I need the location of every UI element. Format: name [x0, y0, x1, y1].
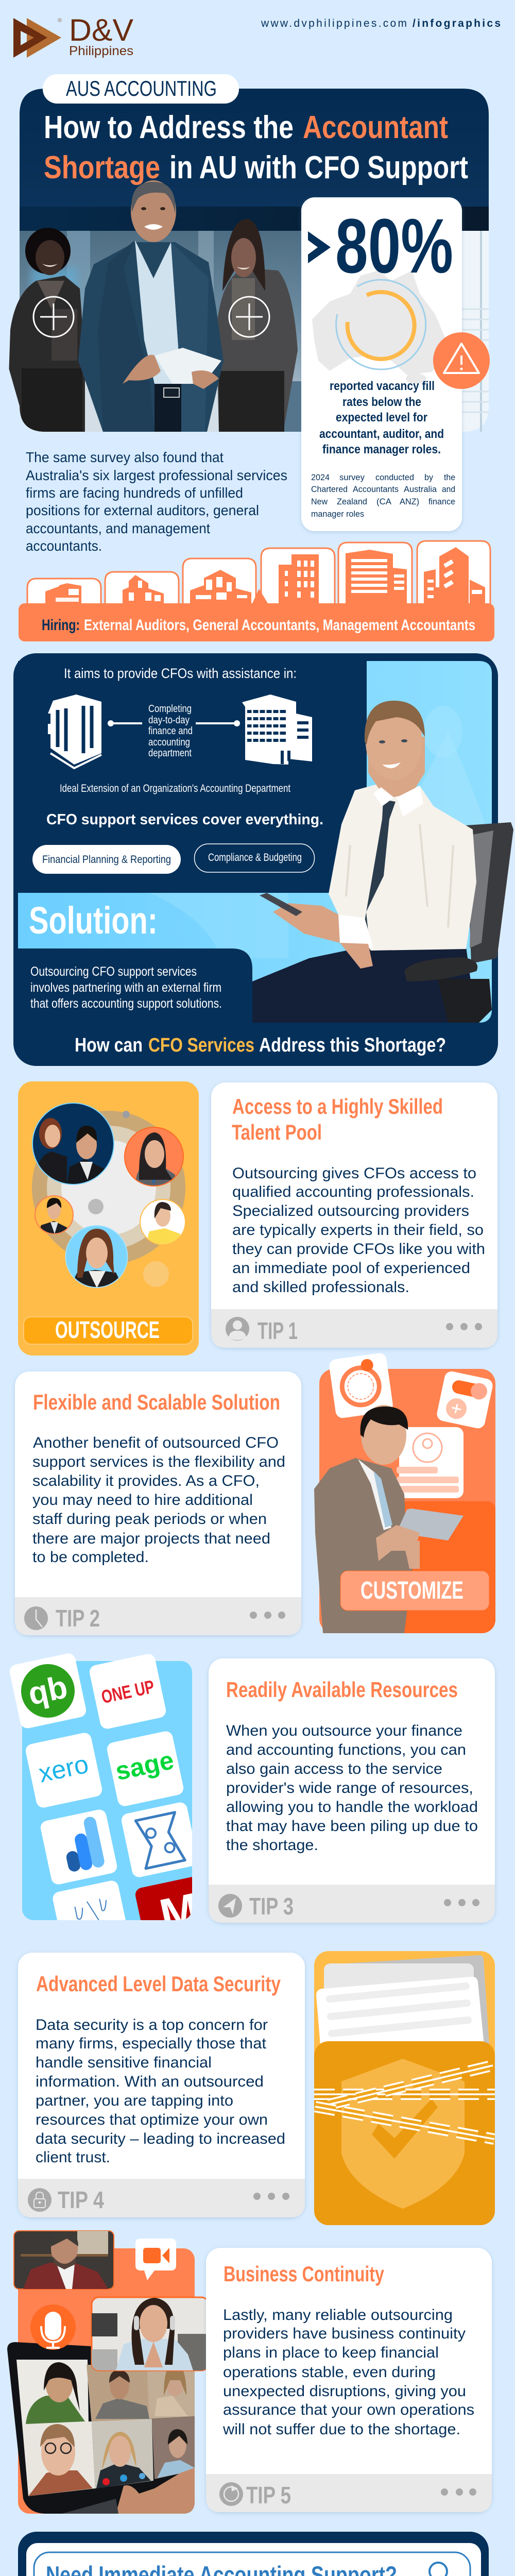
survey source note: 2024: [311, 472, 330, 482]
panel: CFO support services: [13, 653, 513, 1066]
department extension description: Completing: [148, 703, 192, 715]
pill: compliance and budgeting: [195, 844, 314, 872]
heading: Flexible and Scalable Solution: [33, 1390, 280, 1414]
pill: financial planning: [32, 845, 181, 874]
stat card: 80%: [301, 197, 490, 531]
tip label: TIP 4: [58, 2187, 104, 2213]
logo: D&V Philippines: D&V: [69, 13, 133, 47]
icon: lock: [28, 2188, 52, 2212]
progress tile: [329, 1352, 394, 1419]
pill: compliance and budgeting: Compliance & Budgeting: [208, 852, 302, 863]
website url: /infographics: [413, 18, 501, 29]
body text: and skilled professionals.: [232, 1279, 409, 1296]
body text: provider's wide range of resources,: [226, 1780, 473, 1797]
title: Shortage: [44, 150, 160, 185]
navy cover above band: [18, 661, 367, 893]
question heading: [75, 1035, 446, 1056]
body text: staff during peak periods or when: [32, 1511, 267, 1528]
icon: refresh: [219, 2482, 243, 2506]
stat description: accountant, auditor, and: [319, 427, 444, 441]
building icon right: [242, 694, 312, 765]
survey source note: Chartered: [311, 484, 348, 494]
AUS ACCOUNTING tag: AUS ACCOUNTING: [66, 76, 217, 100]
body text: Data security is a top concern for: [36, 2016, 268, 2033]
body text: scalability it provides. As a CFO,: [32, 1472, 260, 1489]
survey source note: [311, 472, 455, 519]
title: Accountant: [303, 110, 448, 145]
card: tip 5 business continuity: [206, 2248, 492, 2512]
solution copy block: [18, 948, 252, 1023]
body text: and accounting functions, you can: [226, 1741, 466, 1758]
body text: allowing you to handle the workload: [226, 1799, 478, 1816]
survey paragraph: Australia's six largest professional services: [26, 467, 287, 483]
tip label: TIP 5: [246, 2482, 291, 2509]
shield: [341, 2059, 465, 2209]
heading: Talent Pool: [232, 1120, 322, 1144]
tile: Sage: sage: [113, 1745, 176, 1786]
body text: there are major projects that need: [32, 1530, 270, 1547]
icon: clock: [24, 1606, 48, 1630]
department extension description: accounting: [148, 737, 190, 748]
search box heading: [34, 2552, 470, 2576]
body text: the shortage.: [226, 1837, 318, 1854]
right woman: [216, 219, 298, 432]
plus icon right: [229, 297, 269, 337]
building icons: [45, 547, 485, 603]
survey source note: manager roles: [311, 509, 364, 519]
body text: unexpected disruptions, giving you: [223, 2383, 466, 2400]
body text: an immediate pool of experienced: [232, 1260, 470, 1277]
toggle tile: [436, 1370, 494, 1430]
photo: business team: [8, 180, 298, 432]
tip label: TIP 3: [249, 1893, 294, 1920]
body text: handle sensitive financial: [36, 2054, 212, 2071]
body text: [32, 1434, 285, 1566]
tile: Xero: xero: [36, 1750, 91, 1788]
dots: [444, 1899, 479, 1906]
building skyline cards: [27, 541, 490, 605]
body text: partner, you are tapping into: [36, 2092, 233, 2109]
panel: software logos illustration: [10, 1654, 192, 1920]
photo: woman with headphones: [92, 2297, 209, 2370]
portrait: two executives: [32, 1103, 114, 1185]
laptop with participant grid: [7, 2342, 195, 2514]
tile: QuickBooks: [8, 1652, 88, 1730]
heading: [232, 1094, 443, 1144]
body text: to be completed.: [32, 1549, 149, 1566]
bubble: camera icon: [135, 2239, 176, 2280]
body text: Specialized outsourcing providers: [232, 1202, 469, 1219]
window blinds strip: [462, 231, 489, 432]
body text: they can provide CFOs like you with: [232, 1241, 485, 1258]
heading: Business Continuity: [224, 2262, 384, 2286]
tile: Xero: [24, 1732, 104, 1809]
icon: person: [226, 1317, 249, 1341]
panel: video call illustration: [7, 2231, 209, 2514]
survey paragraph: firms are facing hundreds of unfilled: [26, 485, 243, 501]
body text: [226, 1722, 478, 1854]
survey paragraph: accountants.: [26, 538, 102, 554]
icon: arrow: [218, 1894, 242, 1918]
photo: man in plaid shirt: [14, 2231, 114, 2289]
AUS ACCOUNTING tag: [43, 74, 239, 104]
survey source note: Australia: [404, 484, 437, 494]
customize button: [340, 1571, 489, 1611]
department extension description: day-to-day: [148, 715, 190, 726]
dots: [253, 2193, 289, 2200]
building icon left: [48, 694, 101, 768]
stat description: rates below the: [342, 395, 421, 409]
stat description: [319, 379, 444, 456]
tile: OneUp: [88, 1653, 167, 1730]
department extension description: [148, 703, 193, 759]
body text: qualified accounting professionals.: [232, 1183, 474, 1200]
survey paragraph: The same survey also found that: [26, 449, 224, 465]
tile: QuickBooks: qb: [25, 1669, 71, 1712]
heading: Readily Available Resources: [226, 1677, 458, 1702]
logo: D&V Philippines: [13, 13, 133, 58]
man with tablet: [314, 1405, 464, 1633]
portrait: woman on orange: [125, 1127, 183, 1190]
body text: When you outsource your finance: [226, 1722, 462, 1739]
left woman: [8, 228, 85, 432]
body text: providers have business continuity: [223, 2325, 466, 2342]
question heading: How can: [75, 1035, 143, 1056]
body text: Another benefit of outsourced CFO: [33, 1434, 279, 1451]
department extension description: finance and: [148, 725, 193, 737]
panel: outsource illustration: [18, 1081, 199, 1355]
body text: data security – leading to increased: [36, 2130, 285, 2147]
survey paragraph: positions for external auditors, general: [26, 502, 259, 518]
pill: financial planning: Financial Planning & Reporting: [42, 854, 171, 866]
stat description: finance manager roles.: [322, 443, 441, 456]
website url: www.dvphilippines.com: [261, 18, 407, 29]
80 percent figure: [308, 202, 453, 289]
survey source note: conducted: [375, 472, 414, 482]
panel: customize illustration: [314, 1352, 495, 1633]
portrait: man on yellow: [35, 1196, 73, 1236]
solution heading: Solution:: [29, 899, 158, 942]
ideal extension caption: Ideal Extension of an Organization's Accounting Department: [60, 783, 290, 794]
documents: [316, 1955, 489, 2045]
building windows: [56, 559, 482, 602]
assistance heading: It aims to provide CFOs with assistance in:: [64, 666, 297, 681]
survey source note: ANZ): [400, 497, 419, 506]
title: [44, 110, 468, 185]
logo: D&V Philippines: ®: [58, 18, 62, 24]
stat description: reported vacancy fill: [330, 379, 435, 393]
photo: seated CFO: [252, 701, 513, 1023]
tile: bottom logo: [53, 1880, 126, 1920]
solution copy block: involves partnering with an external firm: [30, 980, 221, 995]
body text: are typically experts in their field, so: [232, 1222, 484, 1239]
tile: red M: M: [156, 1884, 204, 1942]
card: tip 2 flexible solution: [15, 1371, 301, 1635]
body text: assurance that your own operations: [223, 2401, 474, 2418]
dots: [250, 1612, 285, 1619]
tile: analytics bars: [39, 1808, 118, 1886]
survey source note: (CA: [376, 497, 392, 506]
panel: secure folder illustration: [314, 1951, 495, 2225]
card: tip 3 resources: [209, 1658, 495, 1923]
body text: will not suffer due to the shortage.: [222, 2421, 460, 2438]
tile: Sage: [106, 1730, 185, 1807]
solution copy block: that offers accounting support solutions.: [30, 996, 222, 1011]
panel: hero with title and photo: [8, 89, 489, 432]
body text: also gain access to the service: [226, 1760, 442, 1777]
survey source note: by: [424, 472, 433, 482]
card: tip 1 talent pool: [211, 1082, 497, 1348]
body text: you may need to hire additional: [32, 1492, 253, 1509]
body text: Outsourcing gives CFOs access to: [232, 1165, 476, 1182]
survey source note: survey: [339, 472, 365, 482]
tip label: TIP 2: [56, 1605, 100, 1632]
customize button: CUSTOMIZE: [360, 1577, 464, 1604]
plus icon left: [33, 297, 74, 337]
question heading: CFO Services: [148, 1035, 254, 1056]
survey paragraph: [26, 449, 287, 554]
card: tip 4 data security: [18, 1953, 305, 2217]
center man: [78, 180, 224, 432]
hiring banner: Hiring:: [42, 617, 80, 634]
80 percent figure: 80%: [335, 202, 453, 289]
survey source note: Zealand: [337, 497, 367, 506]
folder front with shield and chains: [314, 2041, 495, 2225]
outsource button: OUTSOURCE: [55, 1316, 160, 1343]
body text: operations stable, even during: [223, 2364, 436, 2381]
body text: Lastly, many reliable outsourcing: [223, 2307, 453, 2324]
map of Australia with rings: [312, 270, 446, 384]
photo: office background: [20, 231, 301, 432]
hiring banner: [19, 603, 494, 641]
survey source note: and: [442, 484, 455, 494]
survey paragraph: accountants, and management: [26, 520, 210, 536]
dots: [441, 2488, 476, 2496]
stat description: expected level for: [336, 411, 427, 425]
panel: call to action: [18, 2532, 490, 2576]
question heading: Address this Shortage?: [259, 1035, 446, 1056]
heading: Advanced Level Data Security: [36, 1972, 281, 1996]
body text: many firms, especially those that: [36, 2035, 267, 2052]
department extension description: department: [148, 748, 192, 759]
body text: client trust.: [36, 2149, 110, 2166]
tile: red M: [135, 1877, 192, 1920]
portrait: woman on blue: [66, 1226, 128, 1288]
profile card: [397, 1427, 464, 1498]
solution background band: [18, 661, 492, 1023]
body text: that may have been piling up due to: [226, 1818, 478, 1835]
survey source note: the: [444, 472, 455, 482]
body text: [222, 2307, 474, 2438]
survey source note: Accountants: [353, 484, 399, 494]
services heading: CFO support services cover everything.: [46, 811, 323, 828]
body text: [232, 1165, 485, 1296]
icon: microphone: [30, 2304, 76, 2350]
body text: information. With an outsourced: [36, 2073, 264, 2090]
tile: percent outline logo: [122, 1802, 192, 1877]
title: How to Address the: [44, 110, 294, 145]
solution copy block: Outsourcing CFO support services: [30, 964, 197, 979]
connector lines: [108, 720, 240, 726]
survey source note: finance: [428, 497, 455, 506]
tip label: TIP 1: [258, 1317, 298, 1344]
warning icon: [433, 332, 490, 389]
talent ring: [32, 1111, 185, 1287]
tile: OneUp: ONE UP: [99, 1676, 156, 1707]
chains: [314, 2065, 495, 2139]
logo: D&V Philippines: Philippines: [69, 44, 133, 58]
dots: [446, 1323, 482, 1330]
body text: resources that optimize your own: [36, 2111, 268, 2128]
heading: Access to a Highly Skilled: [232, 1094, 443, 1118]
website url: [261, 18, 501, 29]
body text: support services is the flexibility and: [32, 1453, 285, 1470]
body text: [36, 2016, 285, 2166]
body text: plans in place to keep financial: [223, 2344, 439, 2361]
survey source note: New: [311, 497, 328, 506]
portrait: woman on white: [140, 1199, 185, 1247]
